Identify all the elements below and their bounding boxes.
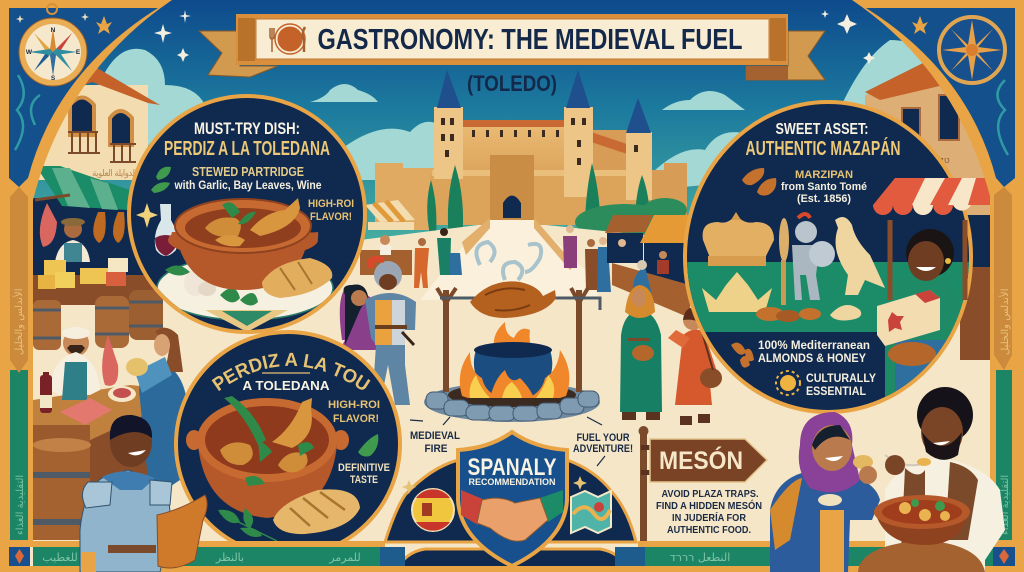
icon: compass: N — [51, 27, 56, 34]
medieval fire label: MEDIEVAL — [410, 430, 460, 442]
text: avoid plaza traps — [656, 488, 762, 536]
fuel your adventure label — [573, 417, 633, 466]
stone ring — [424, 382, 600, 422]
barrel — [858, 540, 985, 572]
posts — [443, 290, 449, 392]
right building: טלה ידיד — [916, 156, 950, 166]
customer in blue — [139, 362, 188, 500]
herb sprigs — [165, 265, 258, 306]
bottom ornament — [205, 310, 288, 332]
callout: definitive taste — [338, 462, 390, 486]
wine flask — [155, 204, 177, 256]
callout: high-roi flavor: FLAVOR! — [333, 413, 379, 425]
corner tiles — [9, 547, 30, 566]
callout: high-roi flavor: FLAVOR! — [310, 211, 352, 223]
hams hanging — [40, 203, 57, 247]
terracotta pot — [168, 222, 318, 258]
flames back — [494, 322, 535, 352]
left market stall — [33, 166, 163, 350]
callout: mediterranean almonds: ALMONDS & HONEY — [758, 351, 866, 365]
vendor — [64, 220, 82, 238]
left building — [35, 65, 160, 180]
knight foreground left — [80, 415, 207, 572]
top left spandrel — [0, 0, 172, 200]
medieval fire label: FIRE — [424, 443, 448, 455]
description: with Garlic, Bay Leaves, Wine — [174, 178, 322, 192]
mid distance market — [360, 200, 690, 318]
icon: bay leaves — [151, 167, 171, 193]
plate — [156, 263, 334, 320]
cheeses — [44, 260, 66, 280]
panel: must-try dish circle — [129, 96, 365, 332]
callout: high-roi flavor — [308, 198, 354, 223]
fuel your adventure label: ADVENTURE! — [573, 443, 633, 455]
villagers — [418, 238, 426, 246]
callout: definitive taste: DEFINITIVE — [338, 462, 390, 474]
tower right — [564, 107, 593, 197]
right frame: التقليدية الغذاء — [1000, 475, 1011, 535]
shield title: SPANALY — [468, 454, 556, 481]
panel: sweet asset circle — [680, 102, 980, 412]
knight figure — [779, 218, 789, 262]
panel: recommendation arch — [385, 460, 636, 572]
callout: mediterranean almonds: 100% Mediterranean — [758, 338, 870, 352]
wine bottle — [40, 375, 52, 413]
right frame: الأندلس والخليل — [998, 288, 1011, 355]
curved heading: PERDIZ A LA TOU — [212, 352, 370, 391]
clouds — [90, 40, 940, 190]
cypress trees — [427, 180, 436, 235]
left butcher counter — [33, 327, 188, 540]
woman body with apron — [885, 304, 962, 397]
roast chicken — [470, 281, 556, 318]
green table band — [680, 262, 980, 332]
barrel — [33, 442, 90, 540]
stew pot — [186, 430, 202, 450]
marzipan description: from Santo Tomé — [781, 181, 867, 193]
text: avoid plaza traps: IN JUDERÍA FOR — [672, 511, 746, 524]
road ramp — [420, 220, 600, 300]
inscription: الدوايلة العلوية — [92, 169, 137, 179]
pot — [474, 350, 552, 396]
sky background — [0, 0, 1024, 240]
ground plaza — [0, 225, 1024, 572]
marzipan description — [781, 169, 867, 205]
icon: spanish flag — [412, 489, 454, 531]
heading: authentic mazapan: AUTHENTIC MAZAPÁN — [746, 137, 900, 160]
woman in green — [620, 285, 662, 420]
right frame — [990, 0, 1024, 572]
woman purple distance — [566, 225, 574, 233]
left frame — [0, 0, 33, 572]
barrels — [33, 300, 61, 350]
panel: perdiz dish circle — [174, 330, 402, 541]
almonds row — [756, 307, 784, 321]
icon: compass: W — [26, 49, 33, 56]
left frame: التقليدية الغذاء — [15, 475, 26, 535]
callout: culturally essential — [776, 371, 876, 398]
callout: definitive taste: TASTE — [350, 474, 378, 486]
striped awning — [873, 178, 990, 300]
bottom frame bands: بالنظر — [215, 551, 244, 564]
top right spandrel — [852, 0, 1024, 200]
heading: must-try dish: MUST-TRY DISH: — [194, 119, 300, 138]
table — [33, 275, 158, 305]
inscription bottom right: النطعل רררד — [670, 551, 730, 564]
ribbon tails — [199, 31, 278, 77]
medieval fire label — [410, 417, 460, 455]
icon: star medallion — [939, 17, 1005, 83]
heading: perdiz a la toledana: PERDIZ A LA TOLEDANA — [164, 138, 330, 160]
windows — [70, 98, 94, 135]
roasting spit and fire — [424, 281, 600, 422]
gate — [490, 155, 534, 225]
text: avoid plaza traps: AVOID PLAZA TRAPS. — [662, 488, 759, 500]
steam swirls — [476, 242, 541, 280]
title banner — [199, 14, 825, 80]
traveller woman with hijab — [770, 412, 880, 572]
meat tray — [60, 398, 112, 425]
callout: mediterranean almonds — [731, 338, 870, 368]
icon: map — [571, 491, 611, 533]
tower small — [626, 132, 652, 200]
stew bowl — [875, 512, 968, 545]
marzipan description: MARZIPAN — [795, 169, 853, 181]
signpost: meson — [638, 426, 767, 542]
marzipan box — [877, 290, 940, 346]
icon: compass: S — [51, 75, 56, 82]
shield subtitle: RECOMMENDATION — [468, 477, 556, 488]
knight and woman centre — [340, 259, 416, 405]
castle — [375, 70, 687, 240]
description — [174, 164, 322, 192]
callout: high-roi flavor: HIGH-ROI — [308, 198, 354, 210]
icon: almonds — [742, 168, 776, 196]
sparkle — [136, 203, 158, 228]
fuel your adventure label: FUEL YOUR — [576, 432, 630, 444]
outer walls — [375, 168, 435, 230]
knight — [374, 261, 402, 289]
callout: high-roi flavor: HIGH-ROI — [328, 399, 380, 411]
marzipan description: (Est. 1856) — [797, 193, 851, 205]
marzipan crown top — [703, 213, 774, 258]
title text: GASTRONOMY: THE MEDIEVAL FUEL — [318, 24, 742, 56]
inscription bottom left: للغطيب — [42, 551, 78, 564]
ham held — [102, 335, 118, 386]
icon: leaf — [358, 434, 378, 456]
icon: handshake — [461, 490, 563, 541]
panel: spanaly recommendation shield — [458, 432, 567, 566]
icon: plate and cutlery — [270, 24, 305, 54]
subheading: A TOLEDANA — [242, 378, 330, 393]
callout: high-roi flavor — [328, 399, 380, 425]
callout: culturally essential: CULTURALLY — [806, 371, 876, 385]
left tent stall — [365, 200, 415, 222]
icon: compass: E — [76, 49, 81, 56]
bottom frame bands: للمرمر — [328, 551, 361, 564]
right tent stalls — [605, 215, 653, 233]
marzipan bird — [835, 217, 885, 295]
marzipan crown lower — [702, 272, 772, 312]
sign text: MESÓN — [659, 445, 743, 475]
man with stew — [858, 387, 1005, 572]
vendor woman head — [906, 229, 954, 281]
icon: compass — [19, 4, 87, 86]
garlic — [184, 270, 206, 296]
bottom frame bands — [0, 541, 1024, 572]
child in orange — [668, 308, 722, 425]
right building — [865, 62, 990, 215]
bread loaf — [273, 489, 360, 534]
right lower stall base — [960, 215, 992, 360]
description: STEWED PARTRIDGE — [192, 164, 304, 179]
main keep — [455, 122, 570, 222]
subtitle: (TOLEDO) — [467, 71, 557, 96]
woman purple — [340, 285, 380, 350]
herb sprig — [218, 508, 262, 537]
bread — [262, 258, 332, 298]
tower left — [434, 107, 463, 179]
sky stars — [154, 10, 875, 64]
butcher — [63, 330, 89, 356]
heading: sweet asset: SWEET ASSET: — [776, 121, 868, 138]
callout: culturally essential: ESSENTIAL — [806, 384, 866, 398]
text: avoid plaza traps: AUTHENTIC FOOD. — [667, 524, 751, 536]
text: avoid plaza traps: FIND A HIDDEN MESÓN — [656, 499, 762, 512]
left frame: الأندلس والخليل — [12, 288, 25, 355]
satchel — [157, 495, 207, 568]
flames front — [460, 352, 500, 398]
